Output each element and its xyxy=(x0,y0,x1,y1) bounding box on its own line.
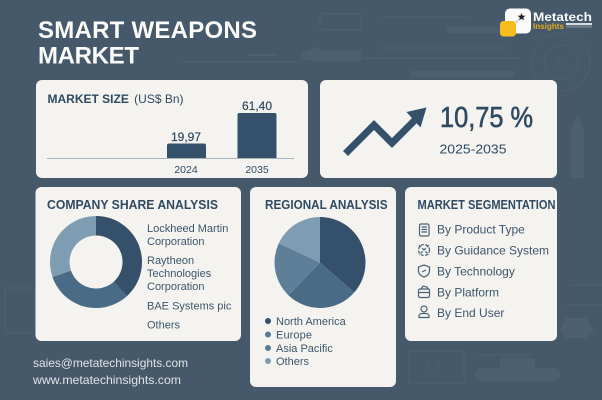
contact information: saies@metatechinsights.com xyxy=(33,356,188,370)
company legend: BAE Systems pic xyxy=(147,300,232,312)
heading: segmentation: MARKET SEGMENTATION xyxy=(418,197,556,212)
segment: by end user: By End User xyxy=(437,306,504,320)
company legend xyxy=(147,223,232,332)
contact information xyxy=(32,356,188,387)
company legend: Lockheed Martin xyxy=(147,223,228,235)
panel: growth rate xyxy=(320,80,557,178)
logo: Insights xyxy=(533,22,565,31)
growth percentage: 10,75 % xyxy=(440,102,533,134)
regional legend xyxy=(265,316,347,368)
segment: by platform: By Platform xyxy=(437,286,499,300)
bar chart: 2024 xyxy=(174,164,198,176)
title: MARKET xyxy=(38,42,139,70)
icon: rising arrow xyxy=(346,108,426,154)
bar chart: 19,97 xyxy=(171,130,201,144)
company legend: Corporation xyxy=(147,281,204,293)
panel: company share analysis xyxy=(36,187,241,341)
panel: regional analysis xyxy=(250,187,396,387)
bar chart xyxy=(47,99,294,176)
regional legend: Asia Pacific xyxy=(276,343,333,355)
segment: by technology: By Technology xyxy=(437,264,515,278)
heading: regional: REGIONAL ANALYSIS xyxy=(265,197,388,212)
growth period: 2025-2035 xyxy=(440,142,507,156)
panel: market size xyxy=(36,80,308,178)
title xyxy=(38,17,257,70)
regional legend: Europe xyxy=(276,330,312,342)
heading: company share: COMPANY SHARE ANALYSIS xyxy=(47,197,218,212)
contact information: www.metatechinsights.com xyxy=(32,373,181,387)
title: SMART WEAPONS xyxy=(38,17,257,44)
bar chart: 2035 xyxy=(245,164,269,176)
segment: by product type: By Product Type xyxy=(437,222,525,236)
company legend: Others xyxy=(147,320,181,332)
company legend: Raytheon xyxy=(147,255,194,267)
logo xyxy=(500,8,592,36)
company legend: Corporation xyxy=(147,236,204,248)
segment: by guidance system: By Guidance System xyxy=(437,244,549,258)
panel: market segmentation xyxy=(405,187,557,341)
donut chart xyxy=(50,216,142,308)
logo: Metatech xyxy=(533,12,592,24)
heading: market size: MARKET SIZE (US$ Bn) xyxy=(48,92,184,106)
bar chart: 61,40 xyxy=(242,99,272,113)
pie chart xyxy=(275,217,366,308)
regional legend: Others xyxy=(276,356,310,368)
company legend: Technologies xyxy=(147,268,212,280)
regional legend: North America xyxy=(276,316,347,328)
